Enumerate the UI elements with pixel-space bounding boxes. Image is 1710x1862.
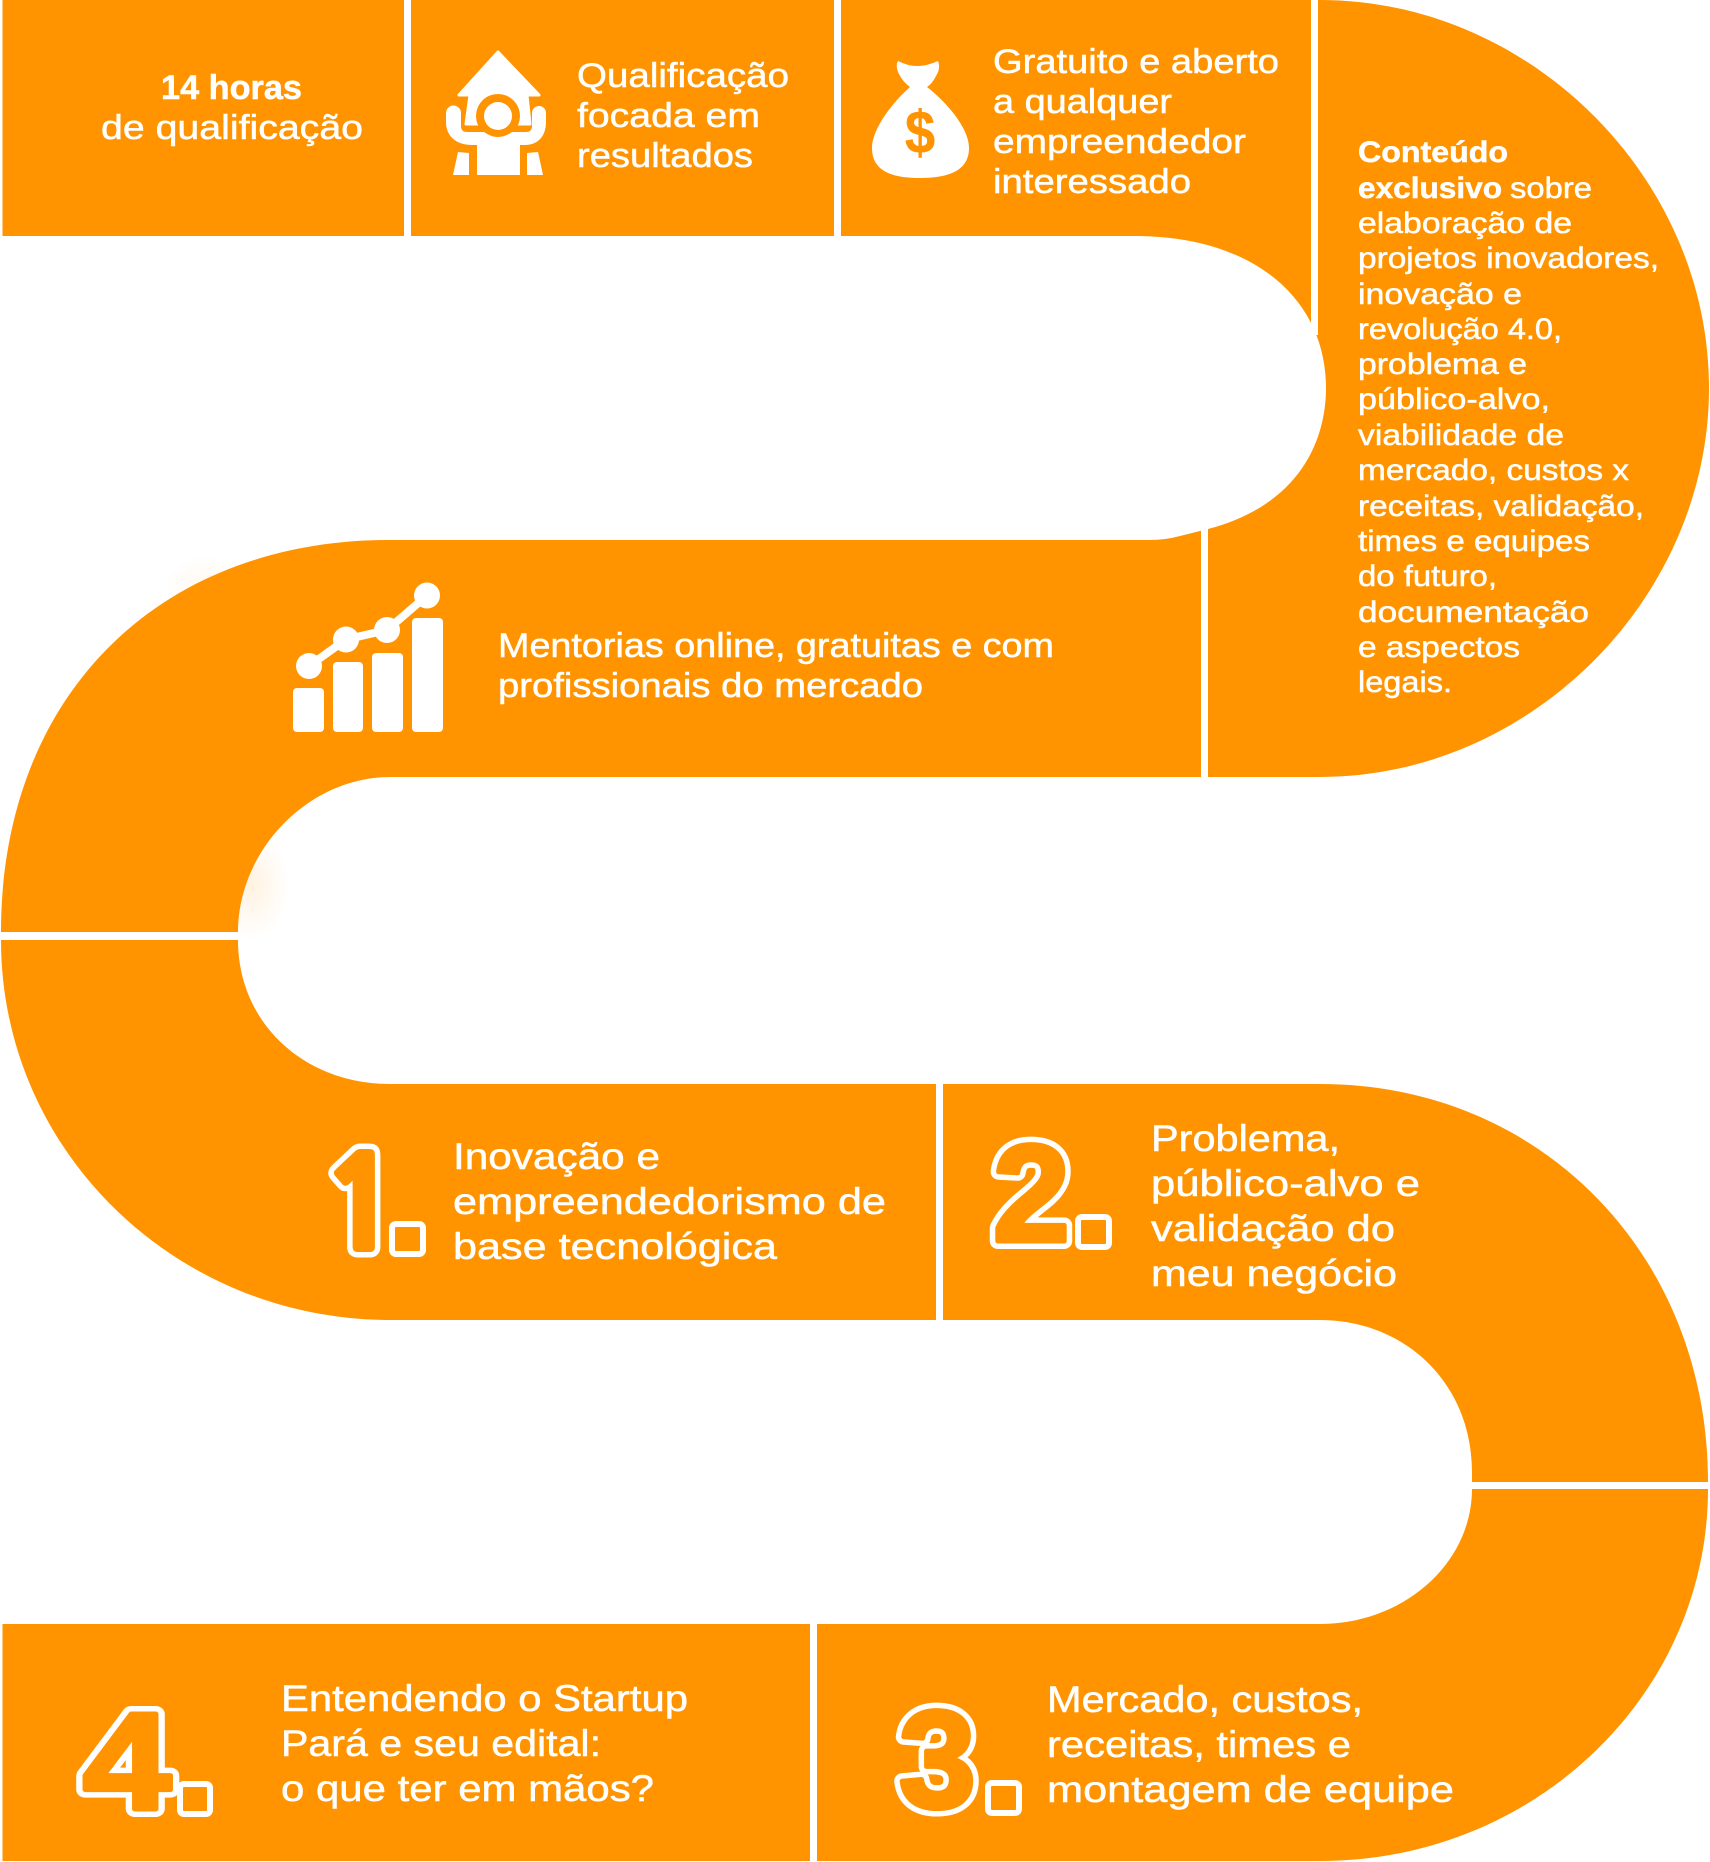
panel: módulo 4 xyxy=(83,1678,688,1839)
panel: qualificação focada em resultados xyxy=(446,52,789,175)
panel: módulo 2: meu negócio xyxy=(1151,1253,1397,1294)
panel: módulo 4: Entendendo o Startup xyxy=(281,1678,688,1719)
panel: conteúdo exclusivo: times e equipes xyxy=(1358,525,1590,558)
panel: mentorias online: profissionais do mercado xyxy=(498,667,923,705)
panel: módulo 3: montagem de equipe xyxy=(1047,1769,1454,1810)
panel: módulo 3 xyxy=(899,1679,1454,1837)
panel: mentorias online: Mentorias online, gratuitas e com xyxy=(498,627,1054,665)
panel: conteúdo exclusivo: viabilidade de xyxy=(1358,419,1564,452)
panel: gratuito e aberto: Gratuito e aberto xyxy=(993,43,1279,81)
panel: conteúdo exclusivo: inovação e xyxy=(1358,278,1522,311)
panel: conteúdo exclusivo: do futuro, xyxy=(1358,560,1497,593)
icon: person lifting arrow xyxy=(446,52,546,175)
icon: money bag xyxy=(872,61,969,178)
panel: conteúdo exclusivo: Conteúdo xyxy=(1358,136,1508,169)
panel: conteúdo exclusivo: receitas, validação, xyxy=(1358,490,1644,523)
numeral 2: 2 xyxy=(993,1117,1070,1271)
panel: conteúdo exclusivo: sobre xyxy=(1510,172,1592,205)
panel: conteúdo exclusivo: documentação xyxy=(1358,596,1589,629)
panel: módulo 1: base tecnológica xyxy=(453,1226,777,1267)
panel: conteúdo exclusivo: problema e xyxy=(1358,348,1527,381)
panel: gratuito e aberto: interessado xyxy=(993,163,1191,201)
panel: conteúdo exclusivo: elaboração de xyxy=(1358,207,1572,240)
panel: qualificação focada em resultados: focada em xyxy=(577,97,760,135)
panel: qualificação focada em resultados: Qualificação xyxy=(577,57,789,95)
panel: módulo 1 xyxy=(323,1136,886,1268)
panel: gratuito e aberto: empreendedor xyxy=(993,123,1246,161)
panel: 14 horas: de qualificação xyxy=(101,109,363,147)
panel: módulo 3: receitas, times e xyxy=(1047,1724,1351,1765)
numeral 1: 1 xyxy=(323,1142,399,1268)
panel: conteúdo exclusivo: exclusivo xyxy=(1358,172,1502,205)
panel: módulo 3: Mercado, custos, xyxy=(1047,1679,1363,1720)
panel: conteúdo exclusivo: público-alvo, xyxy=(1358,383,1550,416)
panel: módulo 1: Inovação e xyxy=(453,1136,660,1177)
panel: mentorias online xyxy=(293,582,1054,732)
panel: conteúdo exclusivo: projetos inovadores, xyxy=(1358,242,1659,275)
numeral 1: 1 xyxy=(323,1142,399,1268)
panel: módulo 2: validação do xyxy=(1151,1208,1395,1249)
panel: conteúdo exclusivo: revolução 4.0, xyxy=(1358,313,1562,346)
panel: qualificação focada em resultados: resultados xyxy=(577,137,753,175)
numeral 4 xyxy=(83,1685,210,1839)
panel: 14 horas: 14 horas xyxy=(161,69,302,107)
panel: módulo 4: o que ter em mãos? xyxy=(281,1768,654,1809)
icon: growth bar chart xyxy=(293,582,443,732)
panel: 14 horas xyxy=(101,69,363,147)
panel: módulo 2 xyxy=(993,1117,1420,1294)
numeral 2: 2 xyxy=(993,1117,1070,1271)
panel: módulo 1: empreendedorismo de xyxy=(453,1181,886,1222)
panel: conteúdo exclusivo: e aspectos xyxy=(1358,631,1520,664)
numeral 4: 4 xyxy=(83,1685,171,1839)
panel: conteúdo exclusivo: legais. xyxy=(1358,666,1452,699)
panel: módulo 2: público-alvo e xyxy=(1151,1163,1420,1204)
icon: money bag: $ xyxy=(905,99,935,166)
numeral 2 xyxy=(993,1117,1109,1271)
numeral 4: 4 xyxy=(83,1685,171,1839)
panel: conteúdo exclusivo xyxy=(1358,136,1659,699)
panel: gratuito e aberto xyxy=(872,43,1279,201)
numeral 3: 3 xyxy=(899,1683,976,1837)
numeral 3 xyxy=(899,1683,1019,1837)
panel: módulo 4: Pará e seu edital: xyxy=(281,1723,601,1764)
panel: conteúdo exclusivo: mercado, custos x xyxy=(1358,454,1629,487)
numeral 3: 3 xyxy=(899,1683,976,1837)
panel: gratuito e aberto: a qualquer xyxy=(993,83,1172,121)
panel: módulo 2: Problema, xyxy=(1151,1118,1340,1159)
